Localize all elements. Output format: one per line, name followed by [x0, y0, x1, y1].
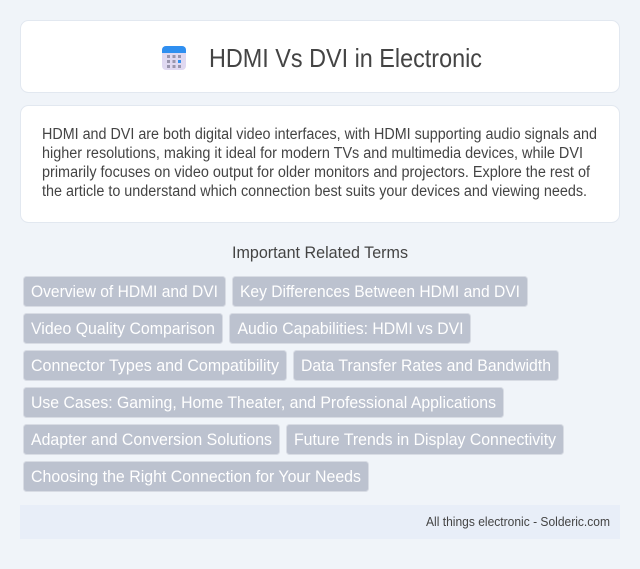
- panel: description: [20, 106, 620, 222]
- tag: [232, 276, 528, 306]
- description text: [42, 126, 597, 200]
- tag: Future Trends in Display Connectivity: [294, 430, 556, 449]
- tag: [294, 350, 558, 380]
- description text: primarily focuses on video output for older monitors and projectors. Explore the rest of: [42, 164, 591, 181]
- tag: Audio Capabilities: HDMI vs DVI: [238, 319, 464, 338]
- tag: Choosing the Right Connection for Your Needs: [31, 467, 361, 486]
- tag: Video Quality Comparison: [31, 319, 215, 338]
- tag: [24, 350, 286, 380]
- tag: Adapter and Conversion Solutions: [31, 430, 272, 449]
- footer bar: [20, 505, 620, 539]
- heading: related terms: Important Related Terms: [232, 244, 408, 262]
- tag: [24, 388, 504, 418]
- tag: Overview of HDMI and DVI: [31, 282, 218, 301]
- tag list: [24, 276, 564, 492]
- tag: [24, 276, 226, 306]
- tag: [24, 424, 280, 454]
- tag: [286, 424, 564, 454]
- tag: [24, 314, 222, 344]
- tag: [24, 462, 368, 492]
- footer text: All things electronic - Solderic.com: [426, 515, 610, 529]
- tag: Data Transfer Rates and Bandwidth: [301, 356, 551, 375]
- tag: Connector Types and Compatibility: [31, 356, 279, 375]
- title: HDMI Vs DVI in Electronic: [209, 43, 482, 73]
- tag: Key Differences Between HDMI and DVI: [240, 282, 520, 301]
- icon: calendar: [162, 46, 186, 70]
- description text: higher resolutions, making it ideal for modern TVs and multimedia devices, while DVI: [42, 145, 583, 162]
- panel: title card: [20, 20, 620, 92]
- description text: the article to understand which connection best suits your devices and viewing needs.: [42, 183, 587, 200]
- description text: HDMI and DVI are both digital video interfaces, with HDMI supporting audio signals and: [42, 126, 597, 143]
- tag: [230, 314, 470, 344]
- tag: Use Cases: Gaming, Home Theater, and Professional Applications: [31, 393, 496, 412]
